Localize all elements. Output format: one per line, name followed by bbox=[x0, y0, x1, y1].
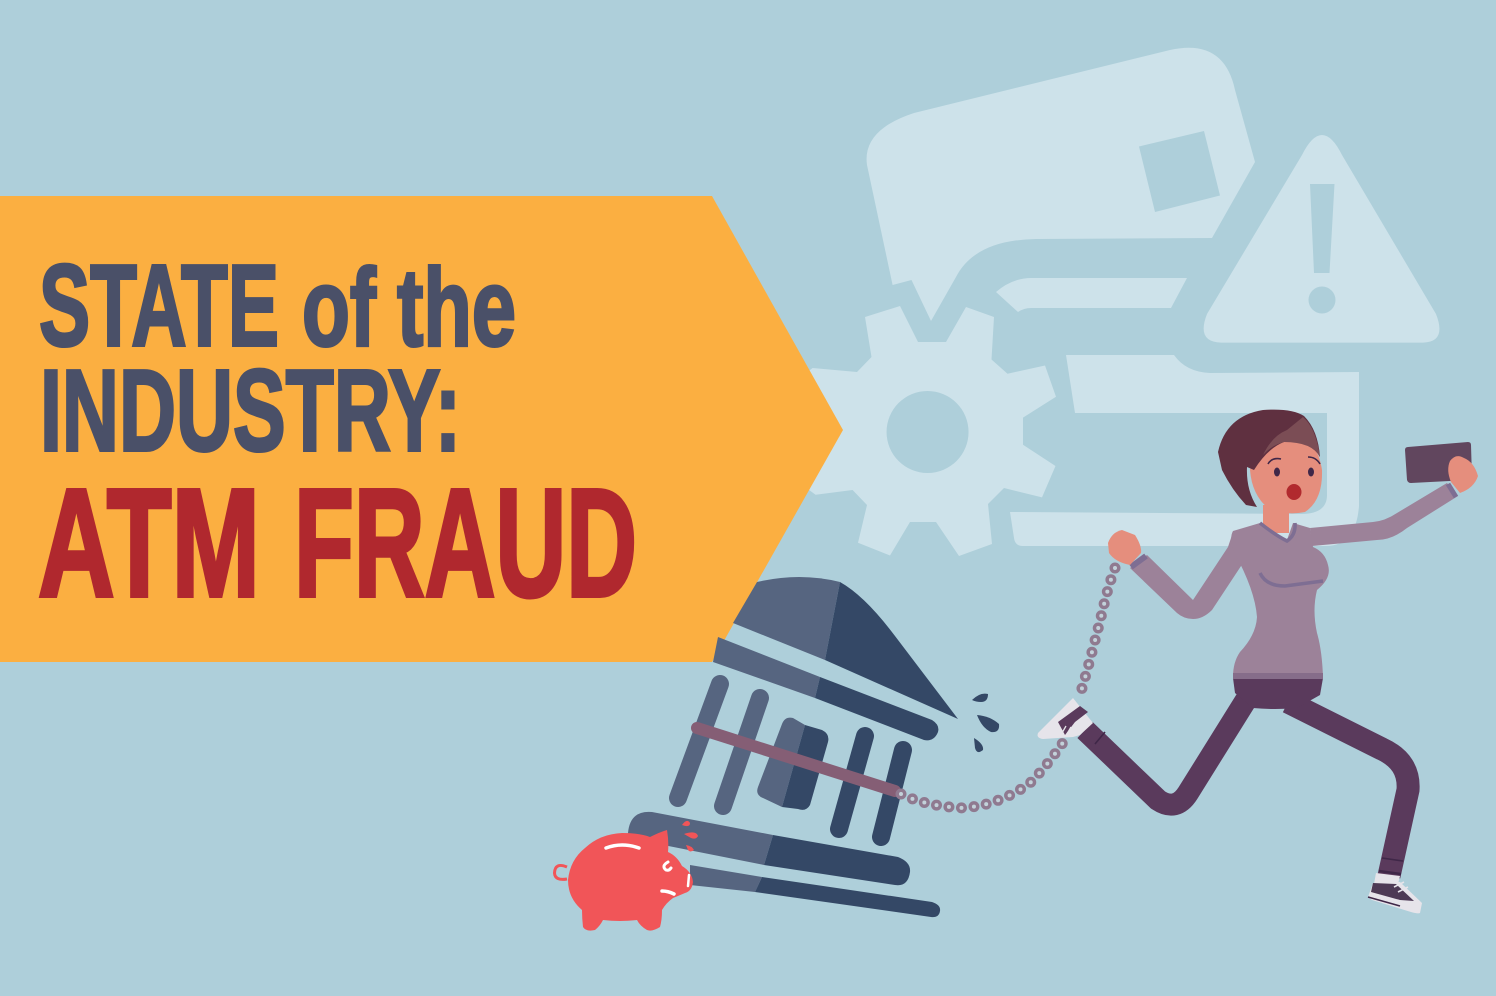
neck bbox=[1263, 505, 1289, 533]
title line 1: STATE bbox=[39, 240, 279, 370]
pig drops bbox=[682, 821, 698, 852]
eyebrows bbox=[1268, 457, 1320, 464]
rear shoe bbox=[1038, 698, 1093, 739]
sweater bbox=[1231, 523, 1329, 677]
front leg bbox=[1288, 702, 1408, 876]
mouth bbox=[1286, 484, 1302, 500]
icon: warning triangle bbox=[1204, 135, 1439, 343]
illustration: running woman bbox=[1038, 410, 1478, 913]
collar bbox=[1260, 523, 1295, 541]
right hand bbox=[1448, 456, 1478, 493]
hips bbox=[1233, 678, 1323, 709]
bank columns left bbox=[678, 684, 760, 806]
bank base lower bbox=[690, 865, 940, 917]
bank base upper bbox=[628, 812, 910, 885]
icon: gear bbox=[775, 306, 1056, 556]
eyes bbox=[1274, 468, 1314, 476]
left arm bbox=[1130, 532, 1243, 619]
bank beam bbox=[713, 637, 938, 740]
icon: lower card outline bbox=[1010, 355, 1359, 546]
chain bbox=[901, 568, 1115, 808]
chain strap bbox=[697, 728, 895, 791]
debris drops bbox=[972, 694, 999, 752]
icon: credit card speech bubble bbox=[867, 48, 1255, 321]
rear leg bbox=[1085, 700, 1246, 805]
pig details bbox=[606, 845, 689, 894]
icon: card stripe bbox=[996, 278, 1187, 312]
pig body bbox=[568, 830, 693, 931]
illustration: piggy bank bbox=[554, 821, 698, 931]
banner bbox=[0, 196, 843, 662]
bank roof bbox=[733, 577, 958, 719]
pig tail bbox=[554, 865, 567, 879]
title line 3: ATM bbox=[38, 457, 260, 629]
bank door bbox=[757, 718, 828, 810]
illustration: collapsing bank bbox=[628, 577, 999, 917]
title line 1: the bbox=[397, 246, 516, 370]
face bbox=[1250, 435, 1322, 513]
sweater hem bbox=[1233, 673, 1323, 679]
head bbox=[1218, 410, 1322, 513]
bust line bbox=[1260, 573, 1323, 586]
title line 3: FRAUD bbox=[294, 457, 637, 629]
left hand bbox=[1108, 530, 1141, 565]
bank columns right bbox=[839, 736, 903, 837]
title line 1: of bbox=[302, 246, 376, 370]
hair bbox=[1218, 410, 1320, 507]
title line 2: INDUSTRY: bbox=[40, 346, 461, 476]
front shoe bbox=[1368, 873, 1422, 913]
right cuff bbox=[1448, 484, 1456, 497]
title bbox=[38, 240, 637, 629]
right arm bbox=[1310, 483, 1458, 546]
leg cuffs bbox=[1095, 732, 1403, 874]
left cuff bbox=[1131, 556, 1146, 567]
hair highlight bbox=[1263, 417, 1320, 457]
title line 3 bbox=[38, 457, 637, 629]
phone bbox=[1405, 442, 1472, 483]
